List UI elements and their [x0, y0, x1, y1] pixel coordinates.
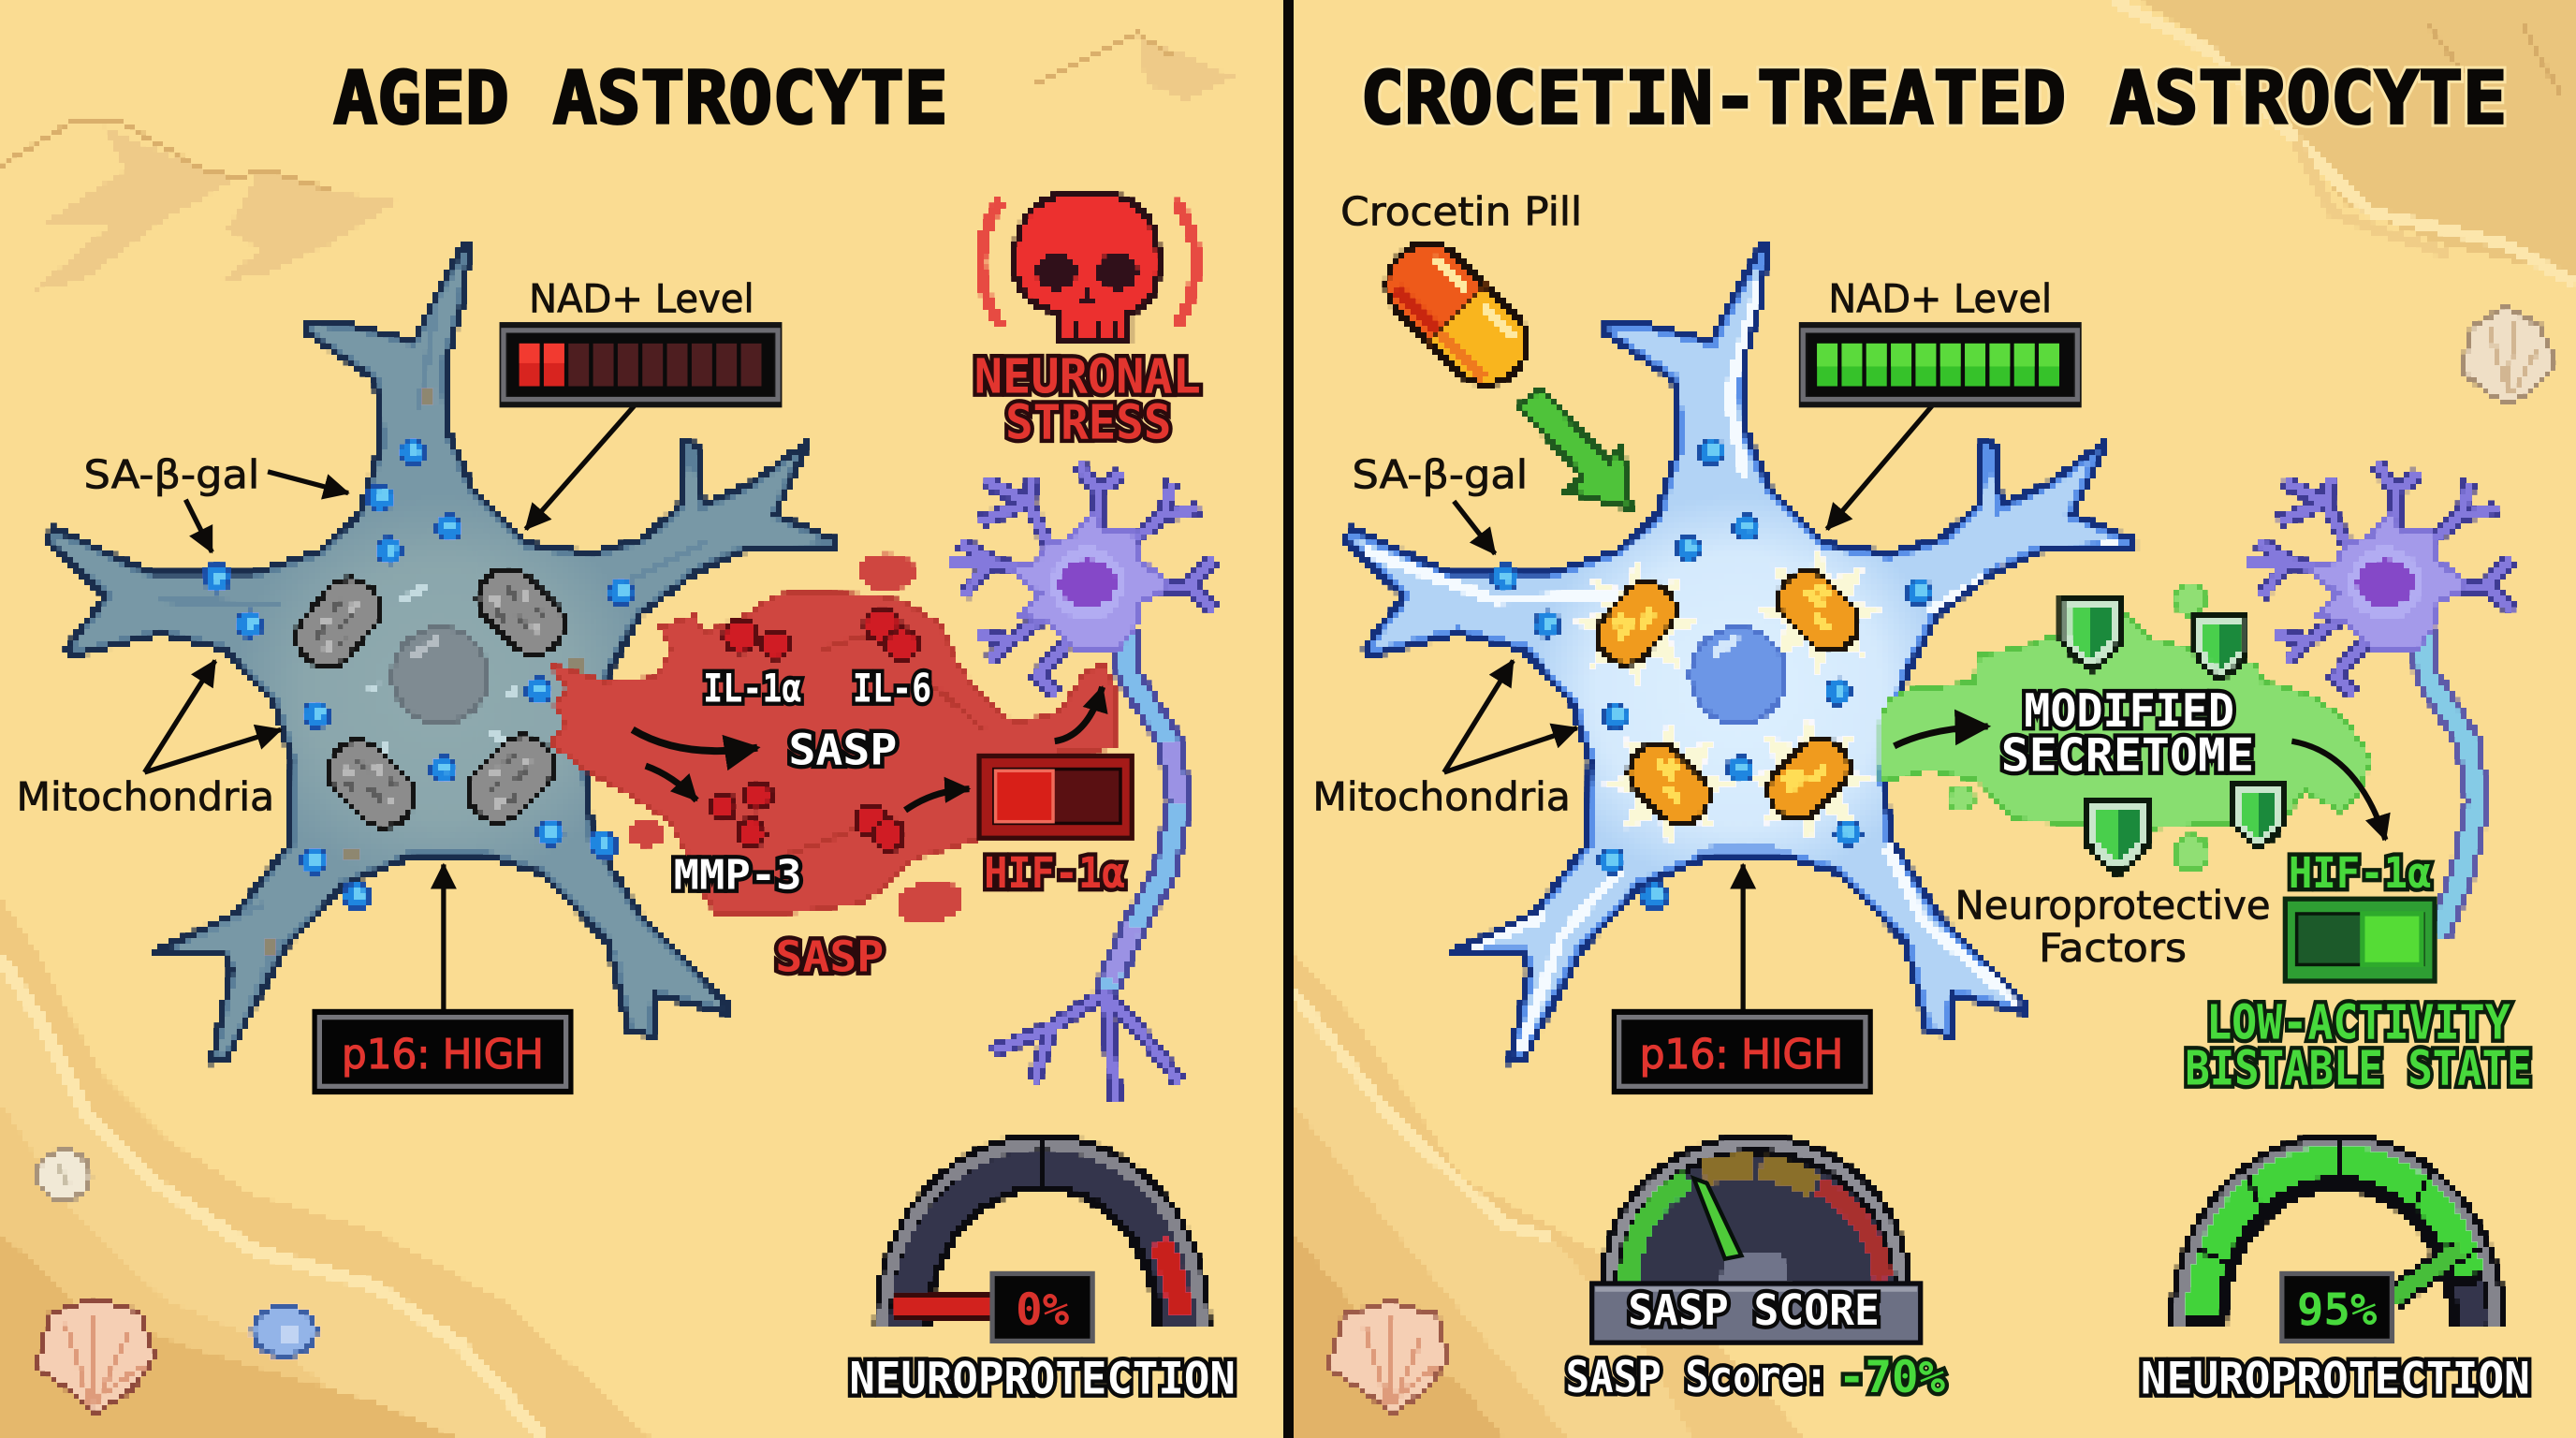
text: IL-1a: IL-1α — [703, 666, 801, 712]
arrow: p16 — [442, 864, 445, 1011]
title: aged: AGED ASTROCYTE — [333, 57, 948, 141]
text: neuroprotective factors: Neuroprotective — [1955, 882, 2271, 928]
cloud arrow: out to switch — [2291, 741, 2385, 840]
arrows and labels: treated — [1312, 188, 2532, 1097]
arrow: pill to cell — [1519, 389, 1630, 507]
text: MMP-3: MMP-3 — [674, 852, 801, 900]
arrows and labels: aged — [17, 276, 1201, 1094]
readout: 95% — [2282, 1273, 2392, 1341]
treated astrocyte cell — [1344, 243, 2134, 1062]
shell: top right — [2461, 307, 2556, 404]
arrow: mitochondria upper — [144, 661, 215, 772]
divider — [1283, 0, 1294, 1438]
icon: shields — [2062, 596, 2284, 873]
neuron: stressed — [948, 465, 1216, 1099]
text: IL-6: IL-6 — [853, 666, 931, 712]
nucleus: healthy — [1690, 628, 1786, 723]
aged astrocyte cell — [46, 243, 836, 1062]
arrow: mitochondria upper — [1444, 661, 1513, 772]
left bottom sand — [0, 896, 652, 1438]
right top sand — [2137, 0, 2576, 278]
cloud arrow: to MMP-3 — [646, 766, 696, 800]
readout: 95%: 95% — [2297, 1284, 2378, 1336]
text: neuronal stress: STRESS — [1005, 396, 1171, 451]
text: SASP score -70%: -70% — [1838, 1352, 1946, 1403]
label: mitochondria: Mitochondria — [1312, 773, 1571, 819]
label: neuroprotection left: NEUROPROTECTION — [849, 1354, 1236, 1405]
box: p16 high — [312, 1009, 574, 1094]
neuron: healthy — [2246, 465, 2513, 935]
cloud arrow: to switch — [905, 789, 970, 810]
box: p16 high: p16: HIGH — [1640, 1031, 1843, 1078]
text: HIF-1a green: HIF-1α — [2289, 848, 2432, 898]
arrow: p16 — [1742, 864, 1745, 1011]
shell: large pink right — [1327, 1301, 1447, 1414]
panel: aged astrocyte — [17, 57, 1236, 1405]
text: modified secretome — [2001, 683, 2254, 782]
title: treated: CROCETIN-TREATED ASTROCYTE — [1360, 57, 2507, 141]
bar: NAD level full — [1799, 322, 2082, 407]
cytokine balls — [710, 608, 917, 850]
text: SASP inner: SASP — [788, 725, 897, 774]
text: HIF-1a red: HIF-1α — [984, 848, 1125, 898]
text: low-activity bistable state: BISTABLE STATE — [2185, 1042, 2532, 1097]
icon: skull — [981, 192, 1196, 342]
nucleus — [392, 628, 488, 723]
cloud arrow: into secretome — [1895, 726, 1988, 746]
cloud arrow: to neuron — [1055, 687, 1103, 741]
text: modified secretome: SECRETOME — [2001, 727, 2254, 782]
label: NAD+ level: NAD+ Level — [529, 276, 754, 322]
secretome cloud — [1881, 585, 2371, 870]
text: SASP score -70%: SASP Score: — [1566, 1352, 1828, 1403]
text: neuroprotective factors: Factors — [2039, 925, 2187, 971]
readout: 0% — [992, 1273, 1092, 1341]
gauge: SASP base and needle: SASP SCORE — [1628, 1285, 1880, 1335]
text: SASP lower: SASP — [775, 932, 884, 981]
switch: HIF-1a on — [979, 756, 1132, 838]
label: neuroprotection right: NEUROPROTECTION — [2141, 1354, 2530, 1405]
gauge: neuroprotection 0% — [884, 1140, 1201, 1325]
box: p16 high: p16: HIGH — [342, 1031, 544, 1078]
box: p16 high — [1612, 1009, 1873, 1094]
mitochondria: healthy — [1587, 560, 1870, 835]
left top dunes — [30, 125, 242, 292]
arrow: SA-beta-gal upper — [268, 472, 348, 493]
arrow: SA-beta-gal lower — [185, 500, 212, 552]
right bottom sand — [1293, 950, 1808, 1438]
cloud arrow: to SASP — [633, 729, 757, 751]
arrow: SA-beta-gal — [1454, 501, 1495, 554]
arrow: NAD to cell — [1827, 406, 1932, 529]
text: neuroprotective factors — [1955, 882, 2271, 971]
SASP cloud — [552, 554, 1114, 928]
label: NAD+ level: NAD+ Level — [1828, 276, 2052, 322]
arrow: mitochondria lower — [144, 729, 281, 772]
gauge: SASP base and needle — [1592, 1179, 1921, 1343]
label: SA-beta-gal: SA-β-gal — [1352, 451, 1528, 497]
switch: HIF-1a low — [2285, 899, 2435, 981]
bar: NAD level low — [500, 322, 782, 407]
text: low-activity bistable state: LOW-ACTIVITY — [2206, 995, 2510, 1050]
SA-beta-gal dots — [1490, 437, 1934, 910]
label: crocetin pill: Crocetin Pill — [1340, 188, 1582, 234]
SA-beta-gal dots — [202, 437, 636, 910]
text: modified secretome: MODIFIED — [2024, 683, 2234, 738]
shell: small white — [37, 1151, 91, 1199]
arrow: mitochondria lower — [1444, 728, 1577, 772]
panel: crocetin-treated astrocyte — [1312, 57, 2532, 1405]
shell: large pink left — [37, 1299, 154, 1414]
text: neuronal stress — [974, 350, 1201, 451]
label: mitochondria: Mitochondria — [17, 773, 274, 819]
mitochondria: damaged — [285, 557, 576, 839]
gauge: neuroprotection 95% — [2180, 1140, 2496, 1325]
arrow: NAD to cell — [526, 406, 634, 529]
shell: blue pebble — [253, 1307, 315, 1356]
label: SA-beta-gal: SA-β-gal — [84, 451, 259, 497]
icon: crocetin pill — [1368, 225, 1546, 404]
title: treated: CROCETIN-TREATED ASTROCYTE — [1360, 57, 2507, 141]
text: low-activity bistable state — [2185, 995, 2532, 1097]
text: neuronal stress: NEURONAL — [974, 350, 1201, 405]
readout: 0%: 0% — [1016, 1284, 1070, 1336]
gauge: SASP score — [1600, 1134, 1910, 1285]
